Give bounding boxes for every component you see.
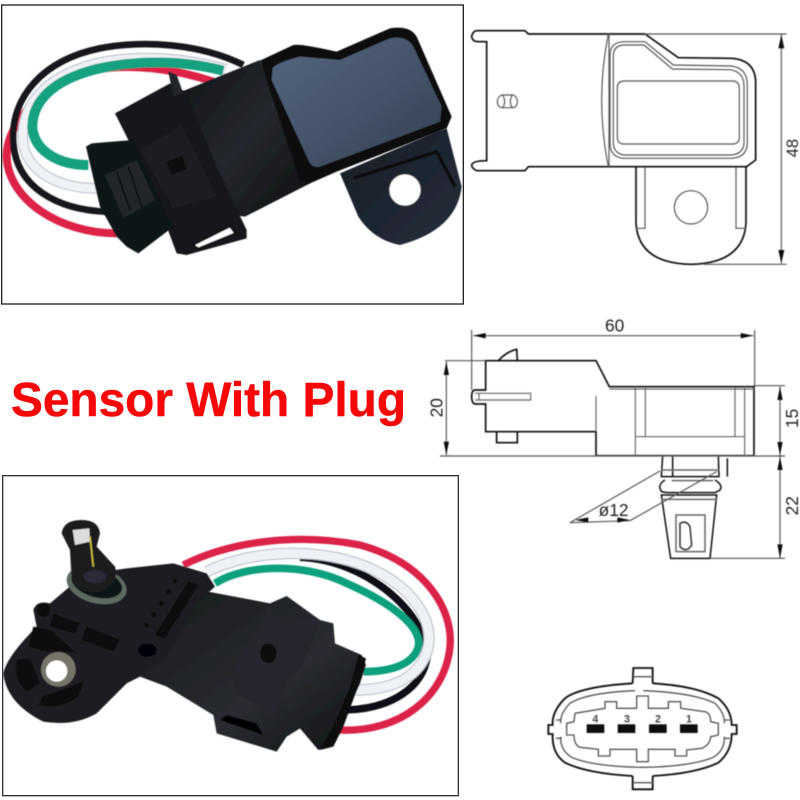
- connector outer shell: [548, 683, 737, 776]
- sensor body barrel: [182, 60, 310, 217]
- nozzle profile: [660, 456, 727, 558]
- dimension labels: 20: [427, 398, 447, 417]
- latch and pin details: [497, 349, 517, 443]
- dimension lines: [645, 34, 787, 264]
- pin numbers: 3: [624, 714, 630, 726]
- dimension labels: ø12: [599, 500, 629, 520]
- dimension labels: [427, 316, 800, 520]
- top plate with recessed face: [260, 28, 452, 183]
- technical drawing: connector pin layout: [548, 668, 737, 789]
- plug collar and latch: [115, 72, 247, 255]
- top and bottom tabs: [633, 668, 653, 789]
- pin blades: [587, 724, 698, 733]
- wires: red, black, white, green: [183, 539, 450, 730]
- inner shell and cavity: [556, 677, 730, 783]
- technical drawing: side view with dimensions 60, 20, 15, 22, ø12: [427, 316, 800, 558]
- mounting plate with holes: [3, 563, 215, 723]
- mounting lug outline: [636, 167, 746, 264]
- inner lines: [475, 387, 754, 456]
- mounting lug: [340, 128, 462, 245]
- panel: top sensor photo: [2, 5, 463, 304]
- wires: red, black, white, green: [7, 44, 243, 233]
- housing outline: [472, 31, 756, 171]
- seal and face outlines: [497, 34, 747, 228]
- sensor body and plug: [140, 590, 366, 752]
- pin numbers: [592, 714, 692, 726]
- pin numbers: 1: [686, 714, 692, 726]
- dimension labels: 60: [605, 316, 624, 336]
- technical drawing: top view with dimension 48: [472, 31, 800, 264]
- pressure nozzle with O-ring: [62, 520, 131, 611]
- panel: bottom sensor photo: [3, 476, 458, 796]
- pin numbers: 2: [655, 714, 661, 726]
- heading: Sensor With Plug: Sensor With Plug: [11, 374, 406, 427]
- dimension lines: [440, 330, 785, 558]
- housing outline: [472, 361, 754, 456]
- pin numbers: 4: [592, 714, 598, 726]
- plug end: [86, 140, 173, 253]
